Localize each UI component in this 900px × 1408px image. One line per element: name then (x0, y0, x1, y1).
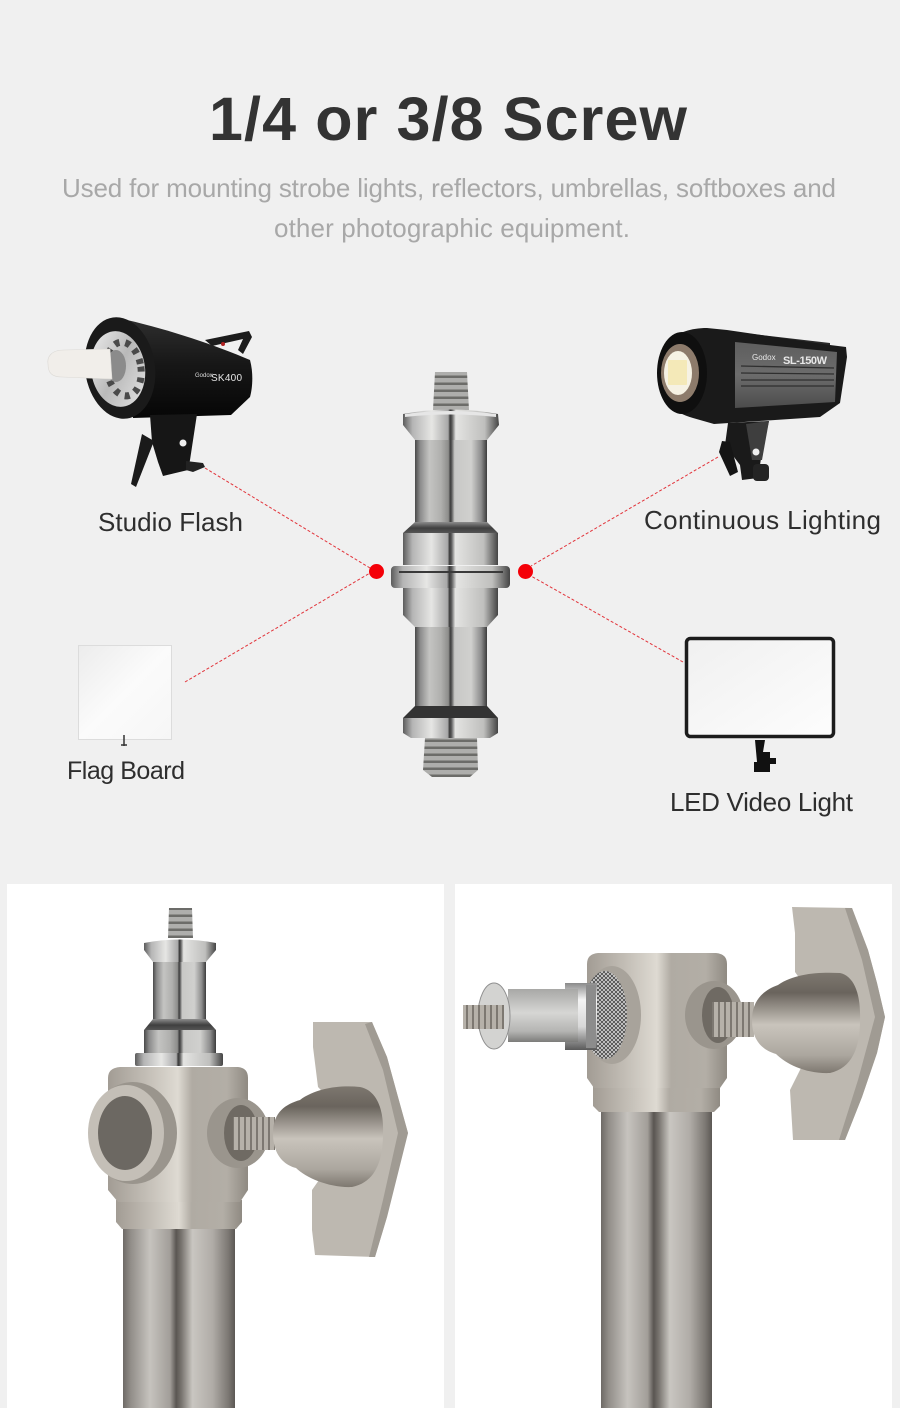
title: 1/4 or 3/8 Screw (209, 85, 688, 153)
clamp collar (593, 1085, 720, 1112)
label: Studio Flash: Studio Flash (98, 507, 243, 537)
wing nut (312, 1022, 408, 1257)
bolt (712, 1002, 754, 1037)
handle (205, 331, 252, 354)
upper flange (403, 410, 499, 440)
vents (741, 366, 834, 386)
model label (752, 353, 828, 367)
clamp collar (116, 1200, 242, 1229)
lamp (664, 351, 692, 395)
ring (391, 566, 510, 588)
label: LED Video Light: LED Video Light (670, 787, 854, 817)
bore ring (88, 1085, 164, 1181)
bore cup (89, 1082, 177, 1184)
lower shaft (415, 627, 487, 707)
icon: studio flash (48, 313, 252, 487)
photo panel: left (7, 884, 444, 1408)
subtitle text block (62, 173, 836, 243)
knob (752, 973, 860, 1073)
photo panel: right (455, 884, 892, 1408)
bracket (725, 421, 769, 480)
upper body (403, 533, 498, 565)
lamp housing (658, 328, 847, 424)
model label: SL-150W (783, 355, 828, 367)
wing nut (790, 907, 885, 1140)
pole tube (601, 1110, 712, 1408)
lower body (403, 588, 498, 627)
front ring (78, 313, 162, 423)
mount (121, 735, 127, 746)
side socket (685, 981, 743, 1049)
pole tube (123, 1228, 235, 1408)
knob (753, 464, 769, 481)
front rim (657, 332, 707, 414)
icon: continuous light (657, 328, 847, 481)
leg (131, 434, 154, 487)
callout lines (185, 457, 718, 682)
lower chamfer (403, 706, 498, 718)
bore hole (98, 1096, 152, 1170)
subtitle text block: Used for mounting strobe lights, reflectors, umbrellas, softboxes and (62, 173, 836, 203)
leg (719, 441, 738, 476)
top rail (727, 331, 830, 349)
panel (686, 638, 834, 736)
bracket (150, 414, 197, 476)
label: Flag Board: Flag Board (67, 757, 185, 785)
bolt (233, 1117, 275, 1150)
model label: Godox (752, 353, 776, 362)
icon: studio flash: SK400 (211, 373, 242, 384)
side panel (735, 342, 837, 408)
bottom thread (423, 738, 478, 777)
upper shaft (415, 440, 487, 523)
clamp body (587, 953, 727, 1088)
subtitle text block: other photographic equipment. (274, 213, 630, 243)
icon: LED video light (686, 638, 834, 772)
clamp body (108, 1067, 248, 1202)
spigot stud (391, 372, 510, 777)
side spigot (463, 983, 597, 1050)
mount (754, 740, 776, 772)
side socket (207, 1098, 269, 1168)
label: Continuous Lighting: Continuous Lighting (644, 505, 881, 535)
board (78, 646, 172, 740)
knob (273, 1086, 383, 1187)
white background (455, 884, 892, 1408)
spigot (135, 908, 223, 1066)
red dots (369, 564, 533, 579)
model label: Godox (195, 373, 213, 379)
reflector (86, 328, 150, 410)
knurled socket (583, 966, 641, 1064)
white background (7, 884, 444, 1408)
lamp body (127, 320, 252, 418)
lower flange (403, 718, 498, 738)
top thread (433, 372, 469, 410)
upper chamfer (403, 522, 498, 533)
knob (186, 461, 205, 472)
icon: flag board (78, 646, 172, 746)
diffuser tube (48, 349, 112, 379)
